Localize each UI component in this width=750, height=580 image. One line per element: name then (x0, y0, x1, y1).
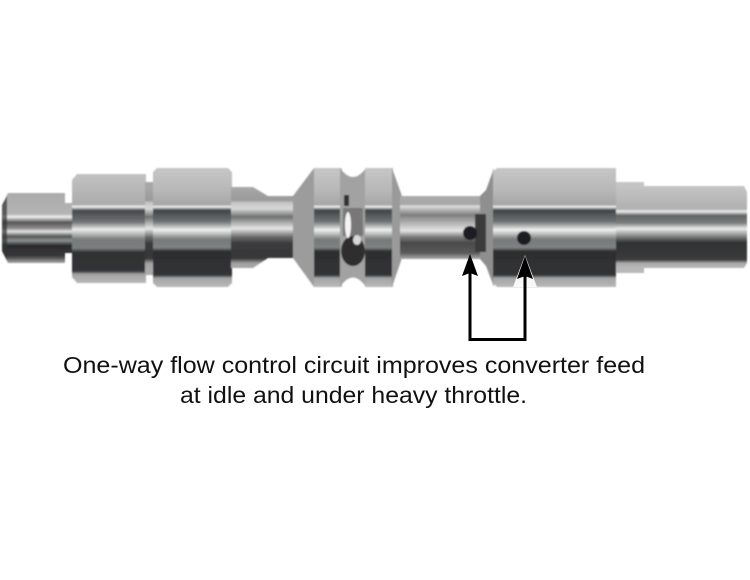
oil hole, right (517, 231, 531, 245)
tip neck (64, 203, 74, 253)
centre groove (340, 168, 366, 287)
groove dark upper spot (344, 195, 349, 206)
groove dark lower patch (341, 236, 365, 266)
groove bright reflection (345, 212, 351, 238)
shoulder shadow (475, 214, 486, 252)
groove lower glint (353, 235, 361, 245)
oil hole, left (463, 226, 477, 240)
photo: machined valve spool (2, 168, 747, 287)
arrowhead, left (462, 254, 478, 276)
tail shaft (644, 186, 747, 268)
tip end cap shadow (2, 196, 7, 260)
right collar (616, 182, 644, 273)
groove mid shading (343, 208, 363, 236)
centre land, left (314, 168, 342, 287)
taper into centre land (293, 168, 314, 287)
taper to shaft (392, 168, 402, 287)
arrowhead, right (517, 256, 533, 279)
left land (72, 174, 146, 283)
caption (63, 352, 645, 408)
right land (493, 168, 616, 287)
caption line 1: One-way flow control circuit improves converter feed (63, 352, 645, 378)
second land (153, 168, 232, 287)
thin shaft with oil hole (400, 196, 485, 259)
neck to centre groove (231, 187, 295, 268)
callout arrows linking both holes (462, 254, 537, 340)
centre land, right (365, 168, 393, 287)
left land collar (145, 182, 154, 275)
caption line 2: at idle and under heavy throttle. (180, 382, 527, 408)
shaft shoulder (480, 168, 494, 287)
white halo, right arrow (513, 255, 537, 287)
spool tip, left end (2, 193, 65, 263)
connector bracket (470, 272, 525, 340)
